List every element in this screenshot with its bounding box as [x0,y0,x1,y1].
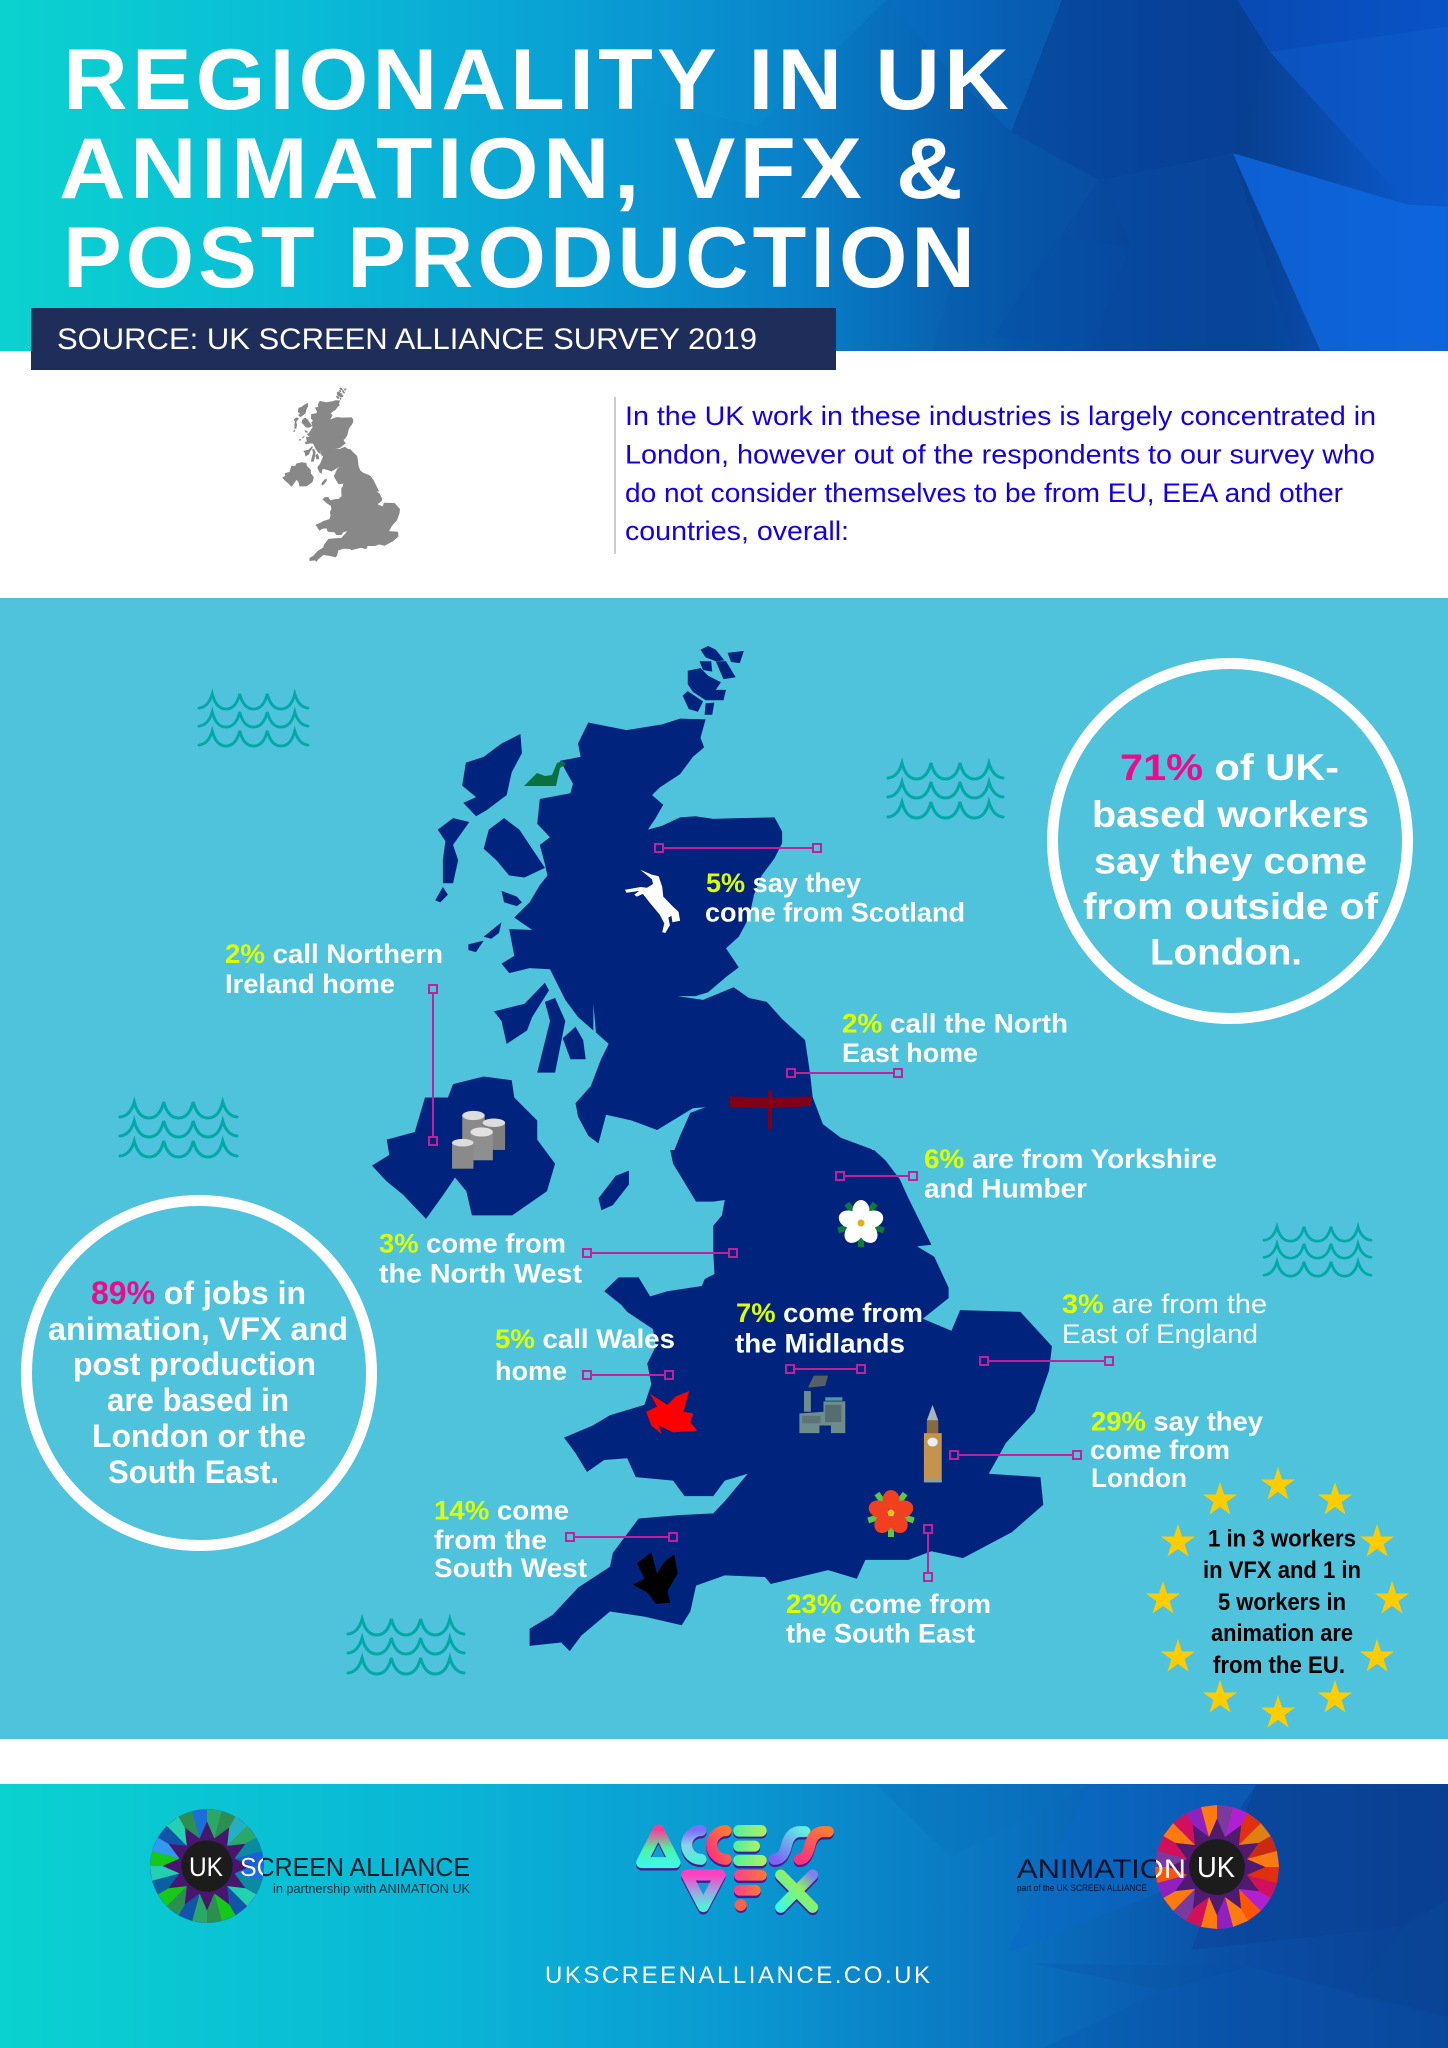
source bar [31,308,836,370]
connector: East of England [980,1357,1113,1365]
callout: 89% London or South East: are based in [107,1382,289,1418]
intro text block [615,397,1376,554]
callout: 89% London or South East: animation, VFX and [48,1311,348,1347]
label: Scotland [705,868,965,928]
callout: 89% London or South East: 89% of jobs in [91,1275,306,1311]
label: Scotland: come from Scotland [705,898,965,928]
callout: EU workers star ring [1146,1467,1409,1728]
callout: EU workers star ring: 5 workers in [1218,1589,1346,1616]
panel: footer [0,1784,1448,2048]
intro text block: London, however out of the respondents to our survey who [625,440,1375,470]
callout: 71% outside London: 71% of UK- [1120,747,1339,788]
title: POST PRODUCTION [63,210,979,306]
label: East of England [1062,1289,1267,1349]
icon: welsh dragon [646,1391,697,1434]
panel: map background [0,598,1448,1739]
callout: 89% London or South East [26,1200,372,1546]
icon: loch ness monster [524,761,566,786]
callout: 71% outside London [1052,664,1408,1018]
label: South West: from the [434,1525,547,1555]
wave icon: left [120,1102,237,1157]
connector: Midlands [786,1365,865,1373]
icon: big ben [924,1405,942,1482]
title: ANIMATION, VFX & [59,121,967,217]
callout: 71% outside London: from outside of [1083,886,1379,927]
connector: Wales [583,1371,673,1379]
wave icon: bottom [348,1619,464,1674]
logo: Animation UK [1017,1805,1279,1929]
title [59,32,1013,306]
label: Wales: home [495,1356,567,1386]
logo: Animation UK: UK [1197,1852,1236,1884]
label: South West [434,1496,587,1583]
label: Northern Ireland: 2% call Northern [225,939,443,969]
label: Midlands: the Midlands [735,1328,905,1358]
label: South East: 23% come from [786,1589,991,1619]
connector: Yorkshire [836,1172,917,1180]
icon: south east red rose [866,1490,916,1537]
connector: North West [583,1249,737,1257]
logo: UK Screen Alliance: SCREEN ALLIANCE [240,1852,470,1882]
panel: header [0,0,1448,351]
label: South West: South West [434,1553,587,1583]
connector: Northern Ireland [429,985,437,1145]
icon: south west dove [633,1552,678,1604]
label: East of England: East of England [1062,1319,1258,1349]
label: South West: 14% come [434,1496,569,1526]
label: Scotland: 5% say they [706,868,861,898]
label: North West: the North West [379,1259,582,1289]
label: North East [842,1008,1068,1068]
connector: Scotland [655,844,821,852]
icon: angel of the north [730,1091,812,1129]
label: Yorkshire and Humber: 6% are from Yorkshire [924,1144,1217,1174]
logo: UK Screen Alliance [150,1809,470,1923]
connector: London [950,1451,1081,1459]
logo: UK Screen Alliance: in partnership with ANIMATION UK [273,1881,470,1896]
label: Yorkshire and Humber: and Humber [924,1174,1087,1204]
label: London: come from [1090,1435,1230,1465]
callout: 71% outside London: say they come [1094,840,1367,882]
source bar: SOURCE: UK SCREEN ALLIANCE SURVEY 2019 [57,323,757,356]
label: North West [379,1229,582,1289]
connector: North East [787,1069,902,1077]
wave icon: right [1264,1227,1371,1276]
callout: 71% outside London: based workers [1092,794,1369,835]
title: REGIONALITY IN UK [63,32,1013,128]
connector: South East [924,1525,932,1581]
website url: UKSCREENALLIANCE.CO.UK [545,1962,930,1989]
logo: Animation UK: ANIMATION [1017,1854,1186,1884]
callout: 89% London or South East: London or the [92,1418,306,1454]
label: London [1090,1406,1263,1493]
label: Northern Ireland [225,939,443,999]
callout: EU workers star ring: from the EU. [1213,1652,1345,1679]
icon: midlands factory [799,1376,845,1433]
logo: Access VFX [642,1825,828,1911]
label: North East: 2% call the North [842,1008,1068,1038]
icon: unicorn [625,870,680,933]
logo: Animation UK: part of the UK SCREEN ALLIANCE [1017,1883,1147,1893]
callout: EU workers star ring: animation are [1211,1620,1353,1647]
label: Midlands: 7% come from [736,1298,923,1328]
label: Wales [495,1324,675,1386]
label: Midlands [735,1298,923,1358]
logo: UK Screen Alliance: UK [189,1852,223,1882]
callout: EU workers star ring: in VFX and 1 in [1203,1557,1361,1584]
intro text block: countries, overall: [625,516,849,546]
wave icon: top left [199,694,308,746]
callout: 89% London or South East: South East. [108,1454,279,1490]
main UK map [372,646,1052,1651]
label: South East: the South East [786,1618,975,1648]
label: Yorkshire and Humber [924,1144,1217,1204]
wave icon: top centre [888,763,1003,818]
label: North West: 3% come from [379,1229,566,1259]
callout: EU workers star ring: 1 in 3 workers [1208,1526,1356,1552]
label: East of England: 3% are from the [1062,1289,1267,1319]
icon: yorkshire white rose [836,1200,886,1247]
connector: South West [566,1533,677,1541]
intro text block: In the UK work in these industries is largely concentrated in [625,401,1376,431]
label: London: 29% say they [1091,1406,1263,1436]
label: London: London [1091,1463,1187,1493]
label: Northern Ireland: Ireland home [225,969,395,999]
label: South East [786,1589,991,1648]
callout: 71% outside London: London. [1150,932,1302,972]
intro text block: do not consider themselves to be from EU, EEA and other [625,478,1343,508]
label: Wales: 5% call Wales [495,1324,675,1354]
icon: small grey UK map [282,388,400,562]
callout: 89% London or South East: post production [73,1346,316,1382]
label: North East: East home [842,1038,978,1068]
icon: giant's causeway columns [452,1111,505,1169]
